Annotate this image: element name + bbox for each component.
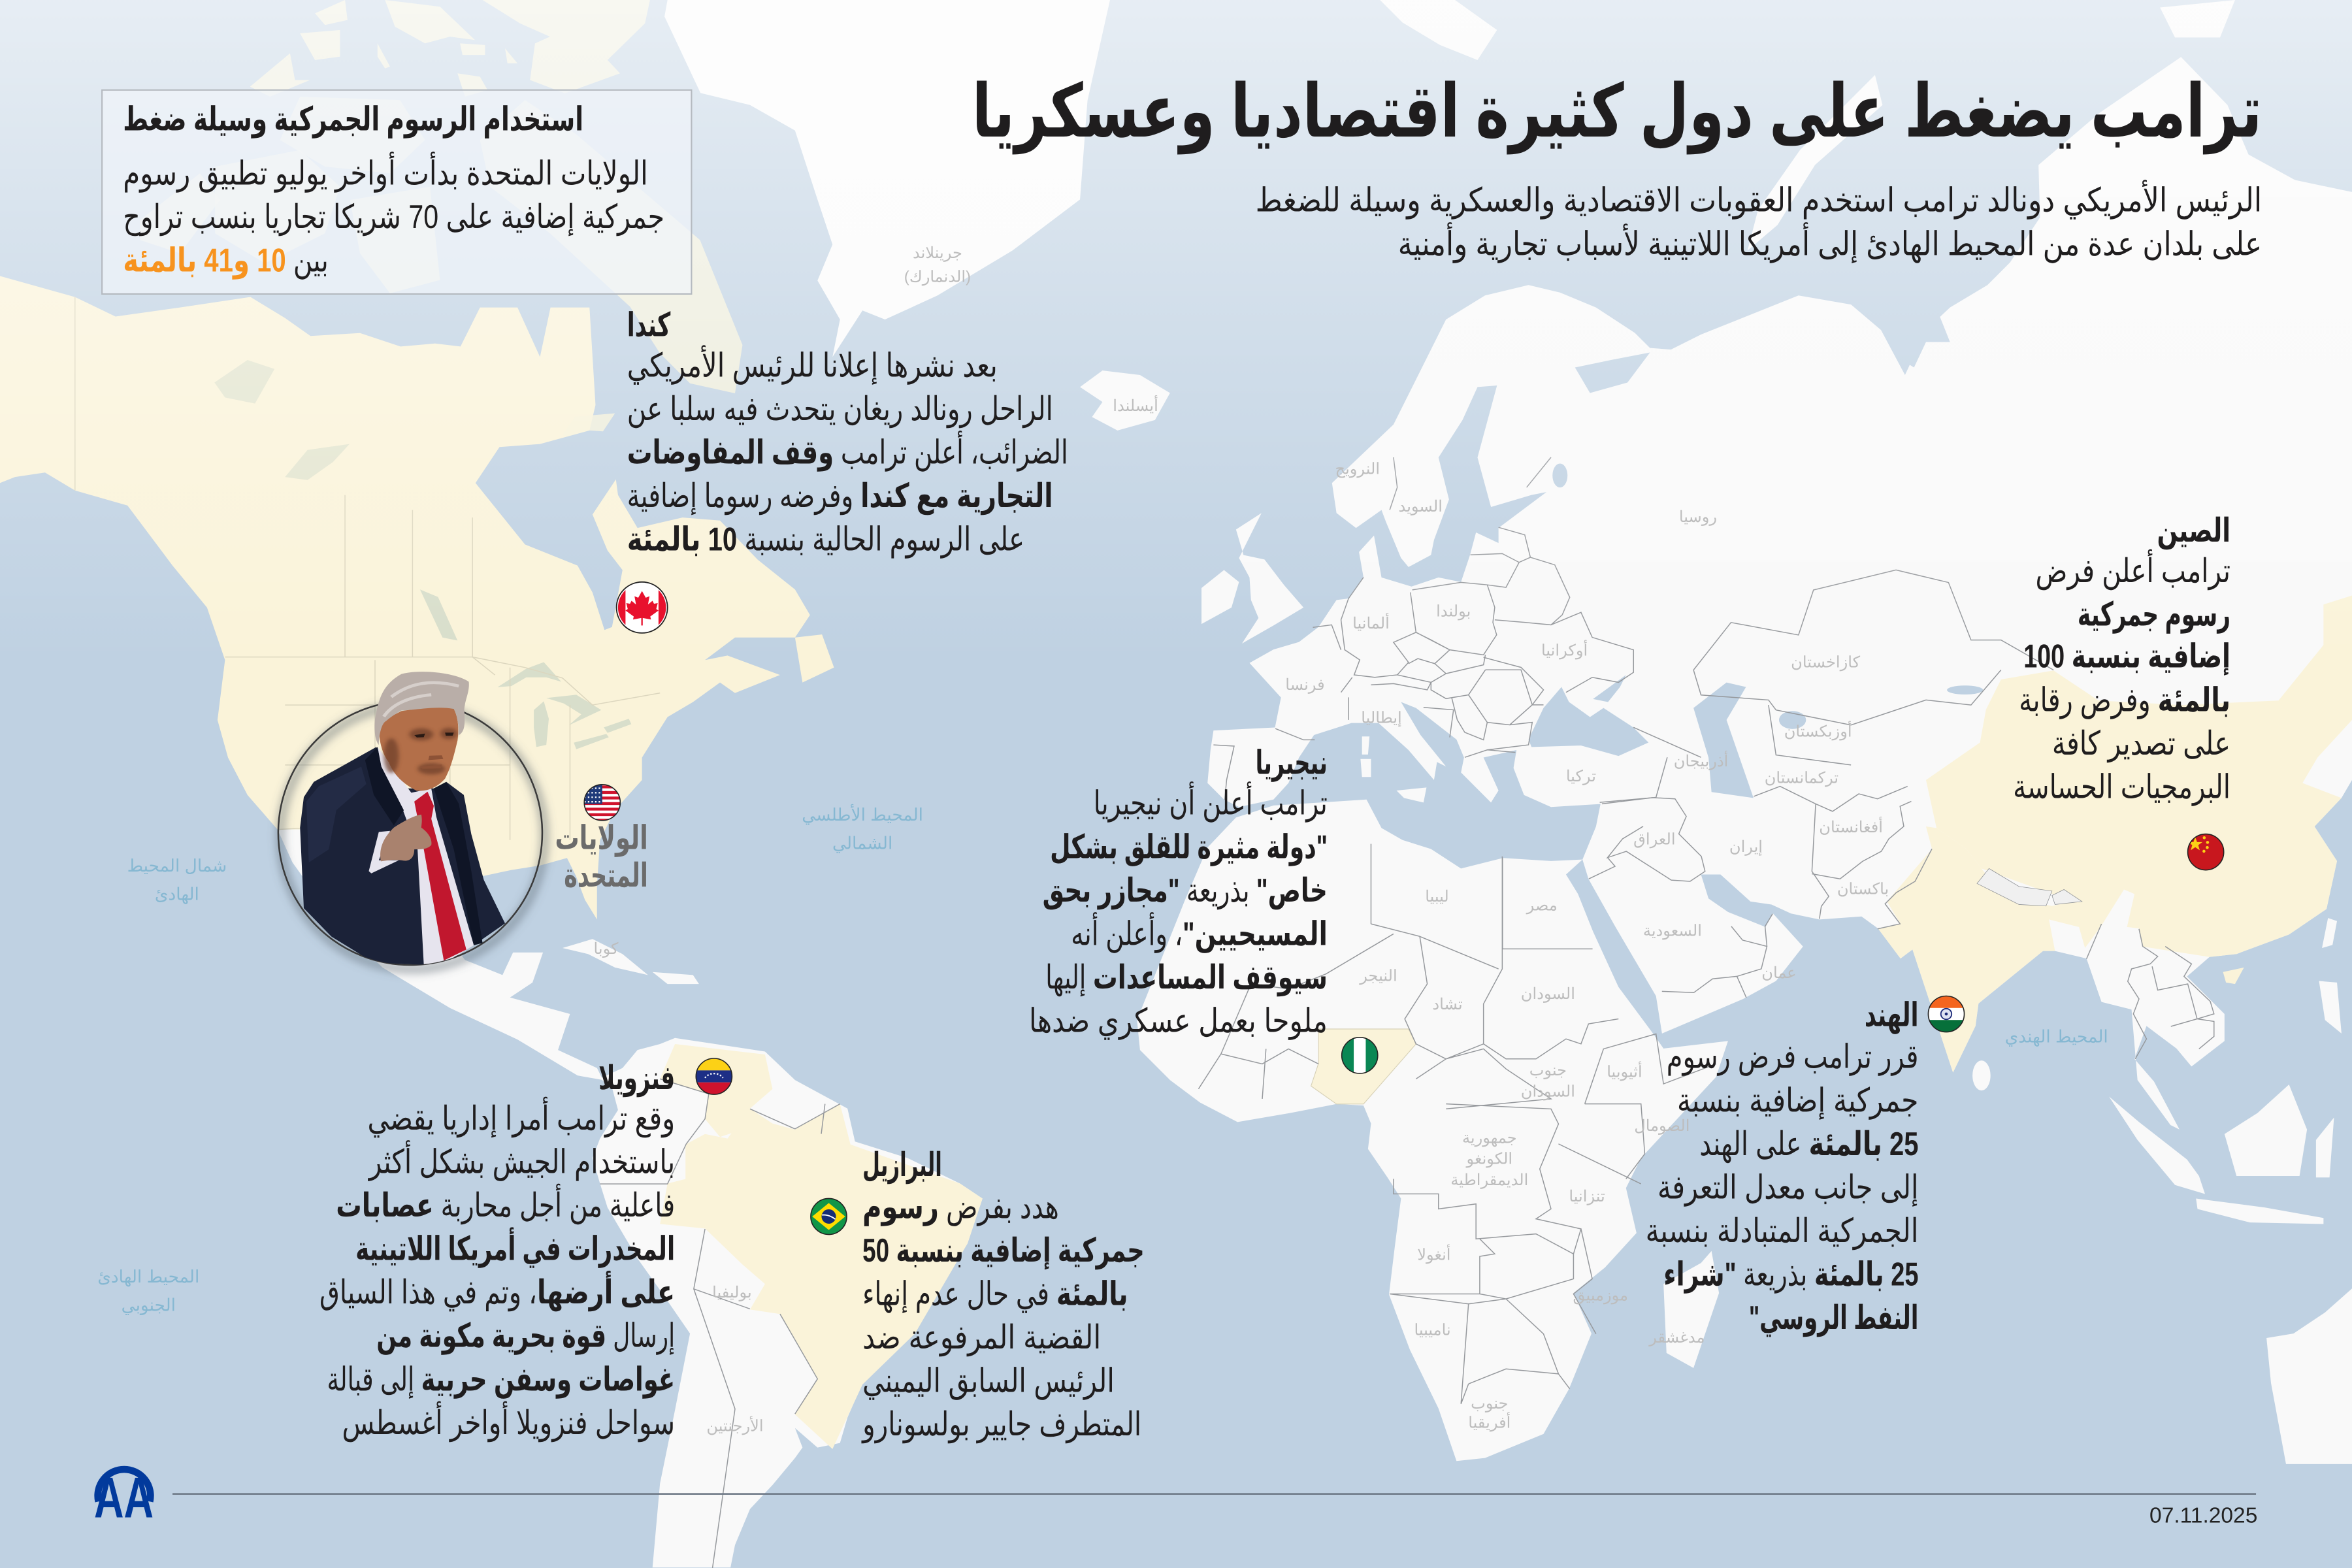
callout: Nigeria: سيوقف المساعدات إليها (1045, 958, 1328, 998)
country name labels: السعودية (1643, 923, 1702, 941)
land: Arctic islands (140, 0, 742, 444)
country name labels: كوبا (594, 941, 619, 958)
callout: China: ترامب أعلن فرض (2036, 549, 2230, 591)
callout: India (1646, 996, 1918, 1338)
country name labels: جرينلاند (913, 244, 962, 263)
ocean labels: شمال المحيط (127, 858, 227, 876)
country name labels: أفريقيا (1468, 1411, 1511, 1433)
callout: India: 25 بالمئة على الهند (1699, 1125, 1918, 1164)
country name labels: (الدنمارك) (904, 269, 971, 287)
callout: Venezuela (319, 1059, 675, 1443)
callout: China: رسوم جمركية (2078, 595, 2230, 634)
country name labels: كازاخستان (1791, 654, 1860, 672)
highlighted country: Canada and United States (0, 276, 834, 919)
land: Eurasia (1207, 57, 2352, 1130)
callout: China: البرمجيات الحساسة (2013, 768, 2230, 807)
country name labels: النيجر (1358, 968, 1397, 985)
country name labels: تركمانستان (1765, 770, 1838, 787)
flag: Canada (617, 582, 668, 633)
highlighted country: India (1878, 826, 2124, 1073)
callout: Canada: كندا (627, 306, 671, 344)
country name labels: ناميبيا (1414, 1322, 1451, 1339)
country borders (75, 297, 2214, 1568)
country name labels (594, 244, 1889, 1435)
country name labels: أوكرانيا (1541, 639, 1588, 660)
callout: Canada: الضرائب، أعلن ترامب وقف المفاوضات (627, 431, 1068, 472)
callout: China: إضافية بنسبة 100 (2023, 638, 2230, 676)
photo: Donald Trump in circle (278, 672, 544, 969)
country name labels: إيران (1729, 838, 1763, 857)
callout: Brazil: الرئيس السابق اليميني (862, 1362, 1115, 1401)
callout: Nigeria: نيجيريا (1256, 744, 1328, 783)
ocean labels: المحيط الهندي (2005, 1029, 2108, 1047)
land: Caribbean islands (563, 939, 699, 984)
country name labels: أوزبكستان (1784, 720, 1852, 741)
callout: Canada: الراحل رونالد ريغان يتحدث فيه سلبا عن (627, 390, 1053, 429)
callout: Nigeria: المسيحيين"، وأعلن أنه (1071, 912, 1328, 954)
country name labels: مصر (1525, 897, 1558, 915)
callout: Venezuela: سواحل فنزويلا أواخر أغسطس (342, 1401, 675, 1443)
ocean labels: الهادئ (155, 887, 199, 904)
country name labels: عمان (1761, 964, 1797, 983)
country name labels: أيسلندا (1113, 395, 1158, 416)
land: Iceland (1080, 370, 1170, 431)
flag: Nigeria (1342, 1037, 1378, 1073)
country name labels: تنزانيا (1569, 1188, 1605, 1206)
callout: India: الهند (1865, 996, 1918, 1035)
flag: India (1928, 996, 1965, 1032)
callout: Canada: التجارية مع كندا وفرضه رسوما إضافية (627, 477, 1053, 516)
country name labels: روسيا (1679, 508, 1717, 527)
callout: Brazil: القضية المرفوعة ضد (862, 1318, 1101, 1358)
country name labels: ليبيا (1425, 888, 1449, 906)
country name labels: تركيا (1566, 768, 1596, 786)
country name labels: الكونغو (1465, 1151, 1512, 1169)
country name labels: جمهورية (1462, 1130, 1517, 1147)
callout: Venezuela: المخدرات في أمريكا اللاتينية (355, 1227, 675, 1269)
callout: Venezuela: على أرضها، وتم في هذا السياق (319, 1271, 675, 1313)
water: inland seas (1529, 308, 1983, 798)
flag: China (2188, 834, 2224, 870)
country name labels: أنغولا (1417, 1243, 1451, 1264)
callout: Nigeria: خاص" بذريعة "مجازر بحق (1043, 872, 1328, 911)
country name labels: فرنسا (1285, 676, 1325, 694)
panel: tariffs as pressure: بين 10 و41 بالمئة (123, 242, 329, 280)
flag: Brazil (811, 1198, 847, 1235)
callout: India: الجمركية المتبادلة بنسبة (1646, 1212, 1918, 1251)
label: United States: الولايات (555, 819, 648, 858)
water: Hudson Bay (476, 431, 623, 630)
callout: India: إلى جانب معدل التعرفة (1658, 1169, 1918, 1207)
callout: India: جمركية إضافية بنسبة (1677, 1081, 1918, 1120)
country name labels: السويد (1399, 498, 1443, 516)
label: United States (555, 819, 648, 894)
highlighted country: Nigeria (1311, 1029, 1416, 1104)
flag: United States (584, 785, 620, 821)
country name labels: أثيوبيا (1607, 1060, 1642, 1081)
ocean labels: الجنوبي (122, 1298, 176, 1316)
land: Nepal and Bhutan (1977, 868, 2082, 906)
callout: Venezuela: فاعلية من أجل محاربة عصابات (336, 1183, 675, 1226)
land: Hainan (2223, 968, 2244, 984)
ocean labels: المحيط الأطلسي (802, 804, 923, 825)
callout: Canada (627, 306, 1068, 559)
country name labels: أفغانستان (1819, 816, 1883, 837)
ocean labels (97, 804, 2108, 1316)
land: Greenland (664, 0, 1110, 357)
panel: tariffs as pressure: الولايات المتحدة بدأت أواخر يوليو تطبيق رسوم (123, 152, 648, 193)
highlighted country: Brazil (660, 1104, 983, 1449)
land: South America (593, 1038, 983, 1567)
country name labels: جنوب (1529, 1062, 1567, 1080)
callout: Venezuela: فنزويلا (598, 1059, 675, 1098)
callout: India: النفط الروسي" (1749, 1299, 1918, 1338)
country name labels: الديمقراطية (1450, 1171, 1528, 1190)
country name labels: الأرجنتين (706, 1414, 764, 1435)
callout: Brazil: هدد بفرض رسوم (862, 1188, 1059, 1227)
land: Mediterranean islands (1360, 736, 1426, 802)
land: Madagascar (1663, 1251, 1719, 1368)
country name labels: السودان (1521, 1083, 1575, 1101)
callout: Brazil: البرازيل (862, 1146, 942, 1185)
flag: Venezuela (696, 1058, 732, 1094)
callout: Nigeria: ملوحا بعمل عسكري ضدها (1029, 1002, 1328, 1041)
callout: China: على تصدير كافة (2052, 725, 2230, 764)
highlighted country: China (1926, 595, 2352, 957)
country name labels: جنوب (1471, 1395, 1509, 1413)
logo: Anadolu Agency: AA (94, 1465, 154, 1529)
callout: Venezuela: وقع ترامب أمرا إداريا يقضي (367, 1096, 675, 1139)
country name labels: السودان (1521, 985, 1575, 1004)
highlighted country: Venezuela (660, 1044, 772, 1137)
country name labels: ألمانيا (1352, 612, 1390, 633)
country name labels: بوليفيا (712, 1284, 752, 1302)
callout: India: قرر ترامب فرض رسوم (1667, 1038, 1918, 1077)
country name labels: النرويج (1335, 461, 1380, 478)
country name labels: العراق (1633, 831, 1676, 849)
callout: Venezuela: إرسال قوة بحرية مكونة من (376, 1317, 675, 1356)
date: 07.11.2025 (2149, 1505, 2257, 1529)
ocean labels: الشمالي (832, 836, 892, 853)
callout: Brazil (861, 1146, 1145, 1445)
callout: China: الصين (2157, 512, 2230, 551)
country name labels: تشاد (1432, 996, 1463, 1014)
callout: Brazil: بالمئة في حال عدم إنهاء (862, 1275, 1128, 1314)
callout: Canada: بعد نشرها إعلانا للرئيس الأمريكي (627, 345, 998, 385)
panel: tariffs as pressure (102, 90, 691, 294)
callout: Canada: على الرسوم الحالية بنسبة 10 بالمئة (627, 521, 1024, 559)
callout: Venezuela: غواصات وسفن حربية إلى قبالة (327, 1360, 675, 1399)
water: Great Lakes and Canadian lakes (214, 360, 631, 749)
country name labels: بولندا (1436, 603, 1471, 621)
callout: China: بالمئة وفرض رقابة (2019, 681, 2230, 720)
panel: tariffs as pressure: استخدام الرسوم الجمركية وسيلة ضغط (123, 101, 583, 140)
callout: Venezuela: باستخدام الجيش بشكل أكثر (368, 1140, 675, 1182)
footer rule (172, 1493, 2256, 1495)
country name labels: أذربيجان (1674, 750, 1729, 771)
callout: India: 25 بالمئة بذريعة "شراء (1663, 1256, 1918, 1294)
callout: Nigeria: ترامب أعلن أن نيجيريا (1094, 781, 1328, 823)
land: Sri Lanka, Sumatra, Borneo, Java, Philippines, Taiwan (1972, 918, 2342, 1224)
country name labels: مدغشقر (1648, 1329, 1705, 1347)
label: United States: المتحدة (564, 857, 648, 894)
country name labels: موزمبيق (1573, 1287, 1628, 1305)
callout: Nigeria (1029, 744, 1328, 1041)
callout: Nigeria: "دولة مثيرة للقلق بشكل (1050, 828, 1328, 867)
land: Africa (1137, 800, 1728, 1461)
country name labels: الصومال (1634, 1117, 1690, 1135)
subtitle (1256, 180, 2262, 264)
land: Mexico and Central America (278, 830, 603, 1080)
callout: Brazil: جمركية إضافية بنسبة 50 (862, 1232, 1145, 1271)
callout: China (2013, 512, 2230, 807)
land: Svalbard and Arctic Russia islands (1380, 0, 2235, 250)
land: Australia (2266, 1288, 2352, 1464)
panel: tariffs as pressure: جمركية إضافية على 70 شريكا تجاريا بنسب تراوح (123, 198, 664, 237)
land: Great Britain and Ireland (1201, 513, 1303, 644)
country name labels: إيطاليا (1361, 710, 1402, 728)
callout: Brazil: المتطرف جايير بولسونارو (861, 1405, 1141, 1445)
top fade overlay (0, 0, 2352, 660)
ocean labels: المحيط الهادئ (97, 1269, 199, 1287)
country name labels: باكستان (1837, 881, 1889, 898)
